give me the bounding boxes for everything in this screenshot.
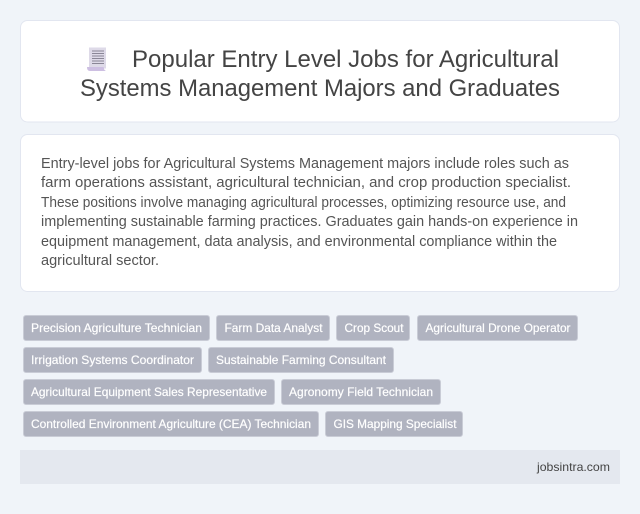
text block: description: farm operations assistant, agricultural technician, and crop production specialist. [41, 175, 571, 191]
tag: Agricultural Equipment Sales Representative: Agricultural Equipment Sales Representative [31, 385, 267, 399]
text block: description: These positions involve managing agricultural processes, optimizing resource use, and [41, 195, 566, 211]
tag: Agronomy Field Technician: Agronomy Field Technician [289, 385, 433, 399]
tag: Agricultural Drone Operator [418, 316, 578, 340]
tag: Agricultural Equipment Sales Representative [24, 380, 274, 404]
tag: Agricultural Drone Operator: Agricultural Drone Operator [426, 321, 570, 335]
tag: Farm Data Analyst [216, 316, 330, 340]
tag: Sustainable Farming Consultant [208, 348, 394, 372]
tag: Sustainable Farming Consultant: Sustainable Farming Consultant [216, 353, 387, 367]
tag: GIS Mapping Specialist [326, 412, 462, 436]
panel: title card [20, 20, 620, 122]
heading [80, 46, 560, 102]
tag: Farm Data Analyst: Farm Data Analyst [224, 321, 323, 335]
text block: description: agricultural sector. [41, 253, 159, 269]
tag: Precision Agriculture Technician [24, 316, 210, 340]
icon: scroll document [87, 48, 106, 71]
tag: Agronomy Field Technician [282, 380, 440, 404]
tag: Irrigation Systems Coordinator: Irrigation Systems Coordinator [31, 353, 194, 367]
text block: description: Entry-level jobs for Agricultural Systems Management majors include roles such as [41, 156, 569, 172]
tag: Irrigation Systems Coordinator [24, 348, 202, 372]
heading: Popular Entry Level Jobs for Agricultural [132, 46, 559, 73]
footer source text: jobsintra.com [536, 460, 610, 474]
tag: Crop Scout: Crop Scout [344, 321, 404, 335]
tag: Crop Scout [336, 316, 410, 340]
text block: description: equipment management, data analysis, and environmental compliance within the [41, 234, 557, 250]
tag: Controlled Environment Agriculture (CEA) Technician [24, 412, 318, 436]
heading: Systems Management Majors and Graduates [80, 75, 560, 102]
footer bar [20, 450, 620, 484]
tag: GIS Mapping Specialist: GIS Mapping Specialist [334, 417, 457, 431]
tag group: job titles [24, 316, 578, 436]
panel: description [20, 134, 620, 292]
tag: Controlled Environment Agriculture (CEA) Technician: Controlled Environment Agriculture (CEA) Technician [31, 417, 311, 431]
text block: description: implementing sustainable farming practices. Graduates gain hands-on experience in [41, 214, 578, 230]
text block: description [41, 156, 578, 269]
tag: Precision Agriculture Technician: Precision Agriculture Technician [31, 321, 202, 335]
